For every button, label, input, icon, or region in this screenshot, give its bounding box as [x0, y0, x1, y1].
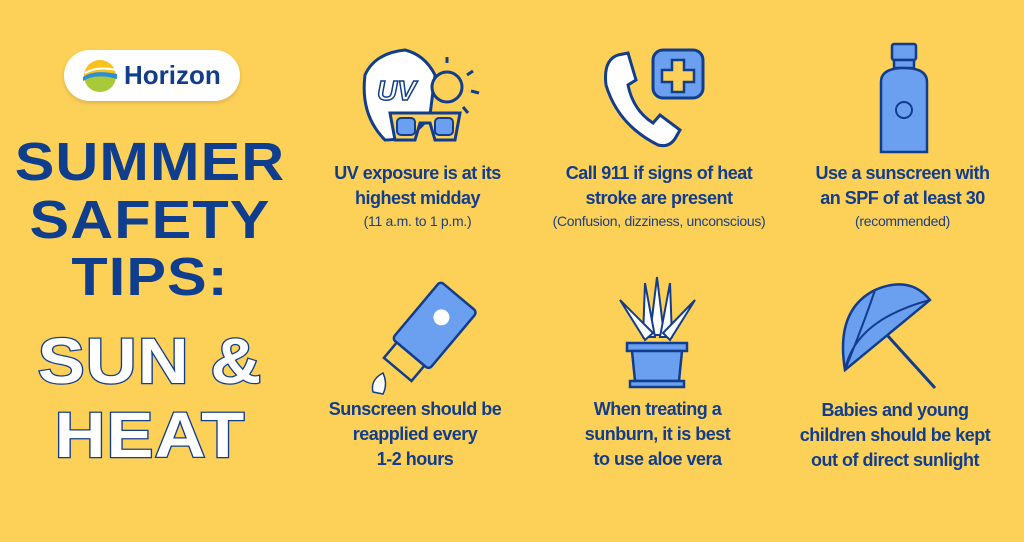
logo icon	[83, 60, 117, 92]
logo pill	[64, 50, 240, 101]
text: aloe: to use aloe vera	[593, 449, 722, 469]
panel: SPF	[815, 42, 990, 229]
text: babies: out of direct sunlight	[811, 450, 979, 470]
text: SPF: (recommended)	[855, 213, 950, 229]
title: SUN &	[38, 325, 262, 397]
text: reapply: 1-2 hours	[377, 449, 453, 469]
text: UV: (11 a.m. to 1 p.m.)	[364, 213, 471, 229]
text: call 911: Call 911 if signs of heat	[566, 163, 752, 183]
text: SPF	[815, 163, 990, 229]
panel: UV	[334, 48, 501, 229]
icon: UV shield sun glasses	[362, 48, 480, 142]
text: UV	[334, 163, 501, 229]
text: babies: children should be kept	[800, 425, 990, 445]
icon: phone and medical cross	[604, 48, 704, 148]
title	[15, 132, 285, 471]
title: HEAT	[55, 399, 245, 471]
logo text: Horizon	[124, 60, 221, 90]
text: reapply	[329, 399, 502, 469]
text: call 911: stroke are present	[585, 188, 733, 208]
title: SUMMER	[15, 132, 285, 192]
icon: sunscreen tube	[372, 282, 477, 395]
panel: call 911	[553, 48, 765, 229]
icon: UV shield sun glasses: UV	[377, 75, 418, 106]
text: UV: UV exposure is at its highest midday	[334, 163, 501, 208]
icon: aloe plant	[619, 276, 696, 388]
title: SAFETY	[30, 190, 270, 250]
panel: aloe	[585, 276, 731, 469]
text: SPF: Use a sunscreen with	[815, 163, 990, 183]
icon: beach umbrella	[842, 283, 936, 389]
text: SPF: an SPF of at least 30	[820, 188, 985, 208]
icon: spray bottle	[880, 42, 928, 154]
panel: babies	[800, 283, 991, 470]
text: aloe	[585, 399, 731, 469]
title: TIPS:	[71, 247, 229, 307]
text: call 911	[553, 163, 765, 229]
text: babies: Babies and young	[821, 400, 969, 420]
text: babies	[800, 400, 991, 470]
text: call 911: (Confusion, dizziness, unconscious)	[553, 213, 765, 229]
panel: reapply	[329, 282, 502, 469]
text: reapply: Sunscreen should be reapplied every	[329, 399, 501, 444]
text: aloe: When treating a	[594, 399, 721, 419]
text: aloe: sunburn, it is best	[585, 424, 730, 444]
